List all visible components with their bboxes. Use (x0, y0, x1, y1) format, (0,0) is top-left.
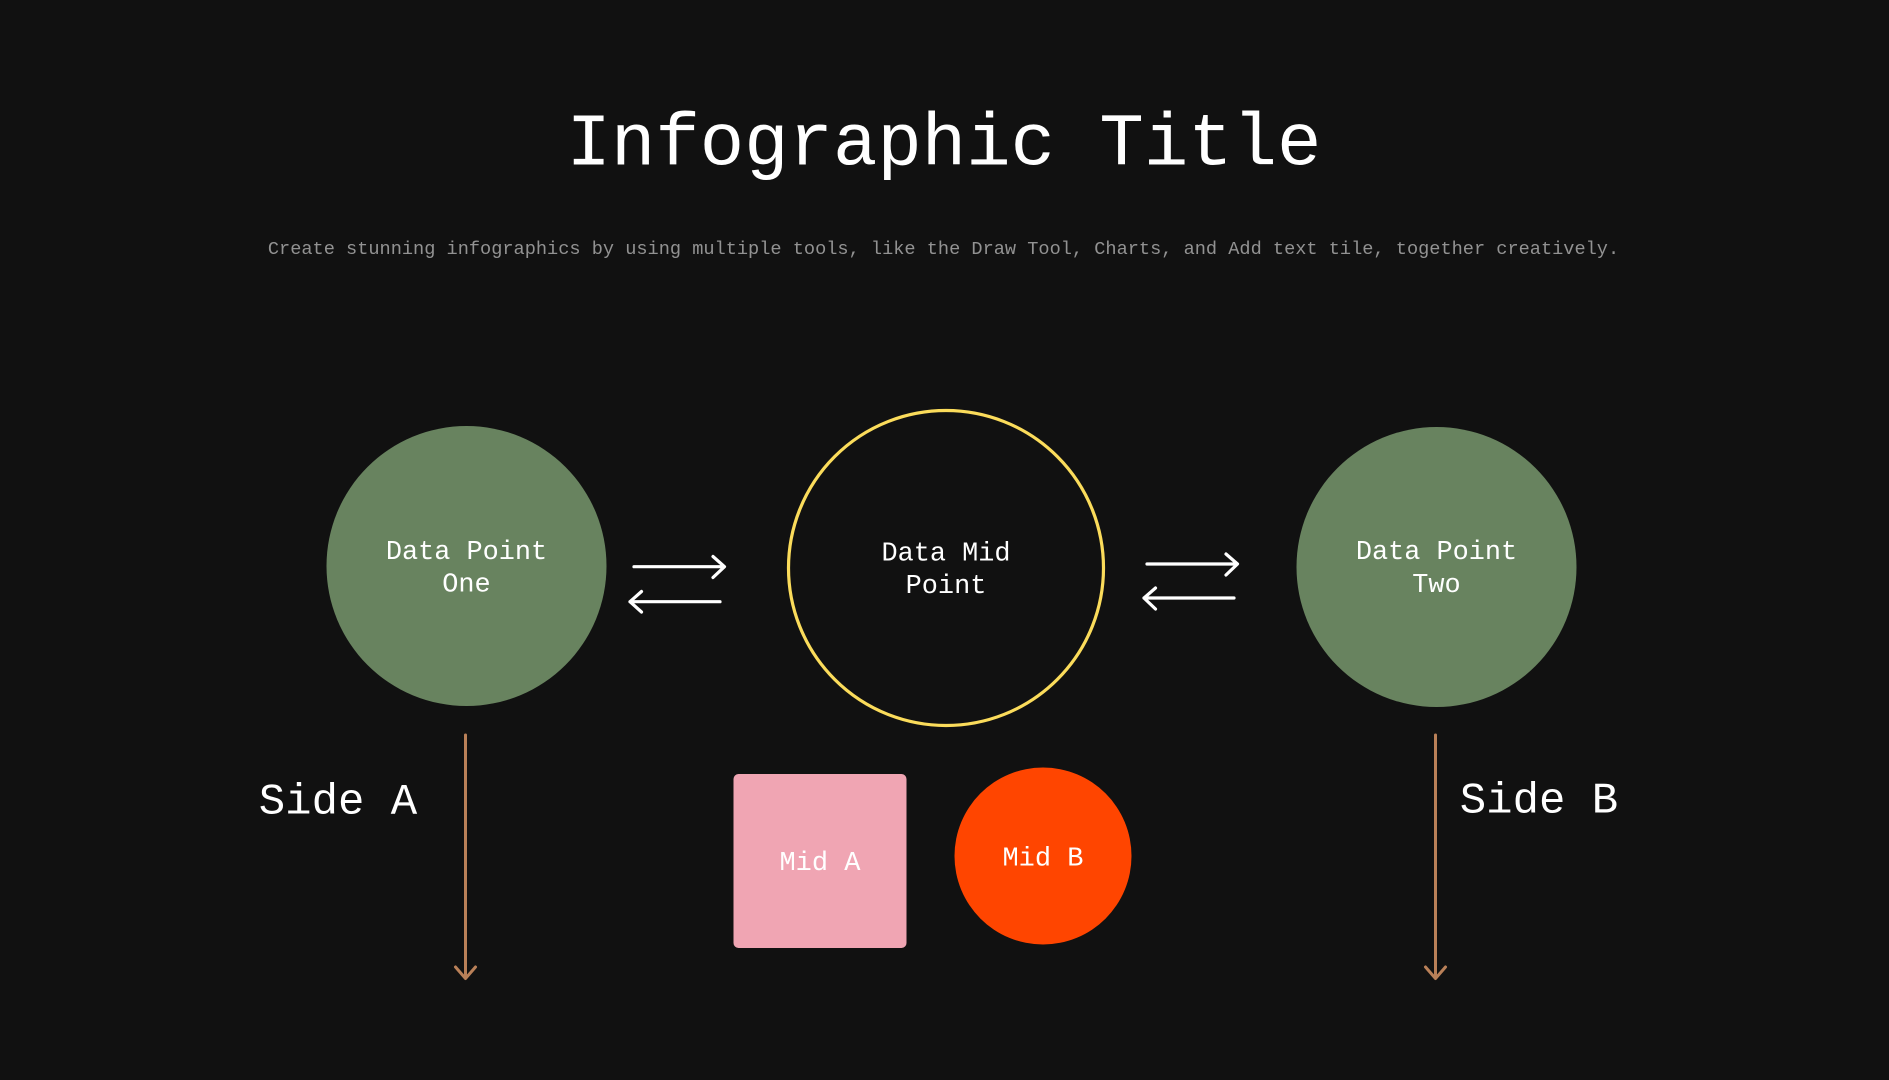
circle: data point one: One (442, 571, 491, 601)
circle: data mid point (788, 410, 1104, 726)
box: mid A: Mid A (779, 849, 861, 879)
arrows: between mid point and data point two (1144, 554, 1238, 609)
circle: data point two (1296, 427, 1576, 707)
circle: data mid point: Point (906, 572, 986, 602)
arrow: side B down (1426, 735, 1446, 978)
arrow: side A down (456, 735, 476, 978)
circle: data mid point: Data Mid (881, 540, 1011, 570)
circle: data point one (326, 426, 606, 706)
circle: mid B (954, 768, 1132, 944)
circle: data point two: Data Point (1356, 538, 1517, 568)
label: side B: Side B (1460, 776, 1618, 826)
subtitle: Create stunning infographics by using multiple tools, like the Draw Tool, Charts, and Add text tile, together creatively. (268, 238, 1619, 260)
circle: data point two: Two (1412, 571, 1461, 601)
title: Infographic Title (567, 104, 1321, 188)
box: mid A (734, 774, 906, 948)
label: side A: Side A (259, 778, 418, 828)
circle: data point one: Data Point (386, 538, 547, 568)
arrows: between data point one and mid point (630, 556, 724, 612)
circle: mid B: Mid B (1002, 844, 1084, 874)
